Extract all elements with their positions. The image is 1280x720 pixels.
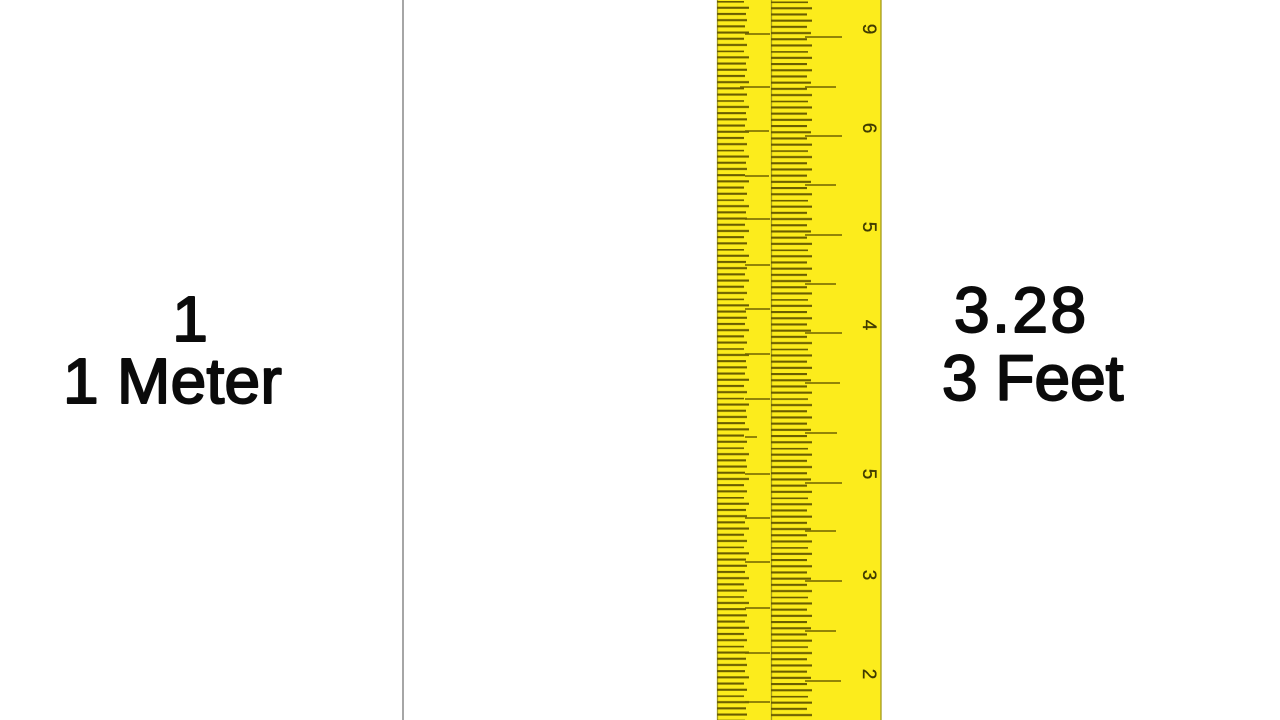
left tick scale: [717, 0, 750, 720]
tape numbers: 9: [858, 24, 879, 34]
left label: meter unit: 1 Meter: [63, 345, 282, 417]
tape numbers: 3: [858, 570, 879, 580]
tape edges: [718, 0, 881, 720]
right tick scale: [771, 0, 813, 720]
right label: feet unit: 3 Feet: [942, 342, 1124, 414]
tape numbers: 2: [858, 669, 879, 679]
tape numbers: 5: [858, 469, 879, 479]
tape numbers: 4: [858, 320, 879, 331]
yellow measuring tape: [717, 0, 882, 720]
vertical divider line: [402, 0, 404, 720]
left label: meter value: 1: [172, 283, 208, 355]
right label: feet value: 3.28: [954, 274, 1089, 346]
tape body: [717, 0, 882, 720]
tape numbers: 6: [858, 123, 879, 133]
long ticks on right scale: [805, 37, 842, 681]
tape numbers: 5: [858, 222, 879, 232]
long ticks on left scale: [740, 34, 770, 702]
tape numbers: [858, 24, 879, 679]
